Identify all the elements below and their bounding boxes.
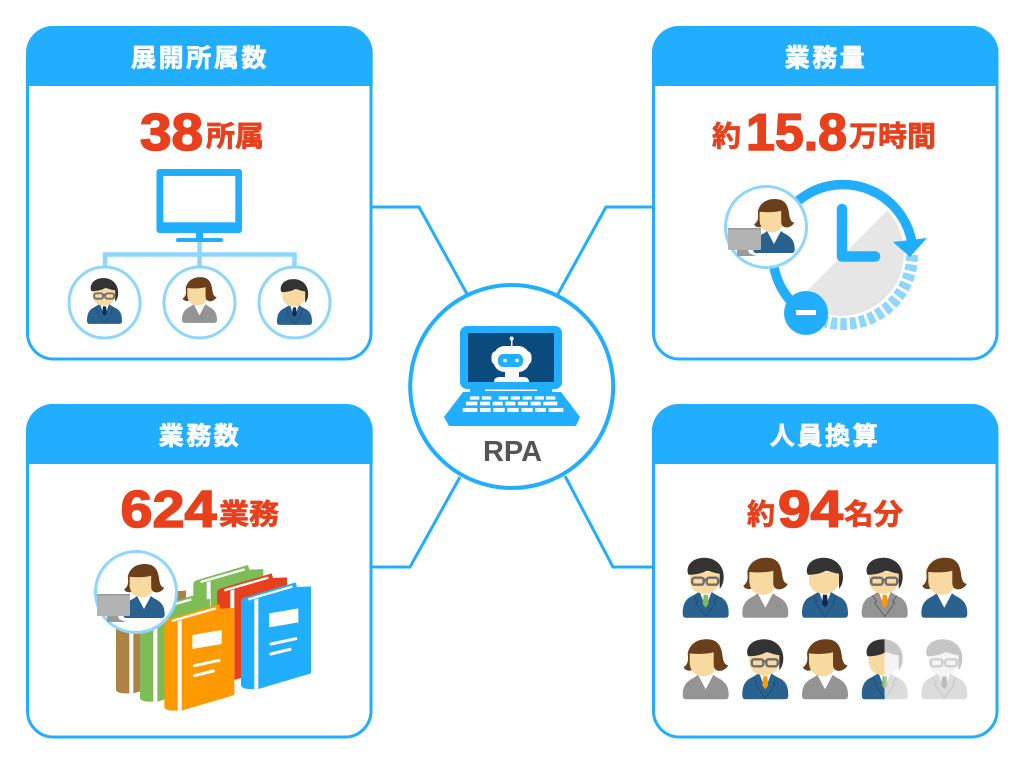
person 9: half faded [862, 639, 908, 699]
value: 約94名分: 94 [778, 481, 843, 539]
value: 624業務: 624 [120, 481, 217, 539]
badge: worker at computer [726, 186, 806, 268]
person 3 [802, 558, 848, 618]
value: 約94名分: 名分 [844, 499, 904, 531]
value: 約94名分: 約 [747, 499, 775, 531]
person 6 [683, 639, 729, 699]
value: 約15.8万時間: 15.8 [746, 104, 847, 162]
panel: 業務数 [26, 404, 373, 737]
heading: 展開所属数 [131, 44, 269, 72]
person 7 [742, 639, 788, 699]
icon: robot [492, 336, 532, 382]
person 10: faded [921, 639, 967, 699]
heading: 業務量 [785, 44, 867, 72]
person 1 [683, 558, 729, 618]
panel: 業務量 [652, 26, 998, 359]
value: 約15.8万時間: 万時間 [849, 121, 936, 153]
person circle: man [259, 267, 330, 338]
person 4 [862, 558, 908, 618]
person grid [683, 558, 967, 699]
value: 38所属: 所属 [206, 121, 264, 153]
value: 624業務: 業務 [219, 499, 279, 531]
org-chart lines [105, 242, 294, 267]
person 5 [921, 558, 967, 618]
icon: books [116, 565, 311, 711]
badge: worker at computer [96, 552, 176, 632]
value: 約15.8万時間: 約 [712, 121, 741, 153]
person circle: man with glasses [69, 267, 140, 338]
value: 624業務 [120, 481, 279, 539]
heading: 業務数 [159, 422, 241, 450]
icon: clock [773, 185, 927, 335]
center circle: RPA [410, 285, 613, 488]
label: RPA: RPA [483, 436, 542, 468]
value: 38所属 [140, 104, 264, 162]
icon: monitor [156, 169, 242, 242]
person 2 [742, 558, 788, 618]
person circle: woman [164, 267, 235, 338]
connector lines [372, 207, 652, 567]
icon: laptop with robot [444, 326, 580, 426]
panel: 展開所属数 [26, 26, 373, 359]
value: 約94名分 [747, 481, 904, 539]
person 8 [802, 639, 848, 699]
value: 38所属: 38 [140, 104, 203, 162]
value: 約15.8万時間 [712, 104, 936, 162]
panel: 人員換算 [652, 404, 998, 737]
heading: 人員換算 [770, 422, 880, 450]
